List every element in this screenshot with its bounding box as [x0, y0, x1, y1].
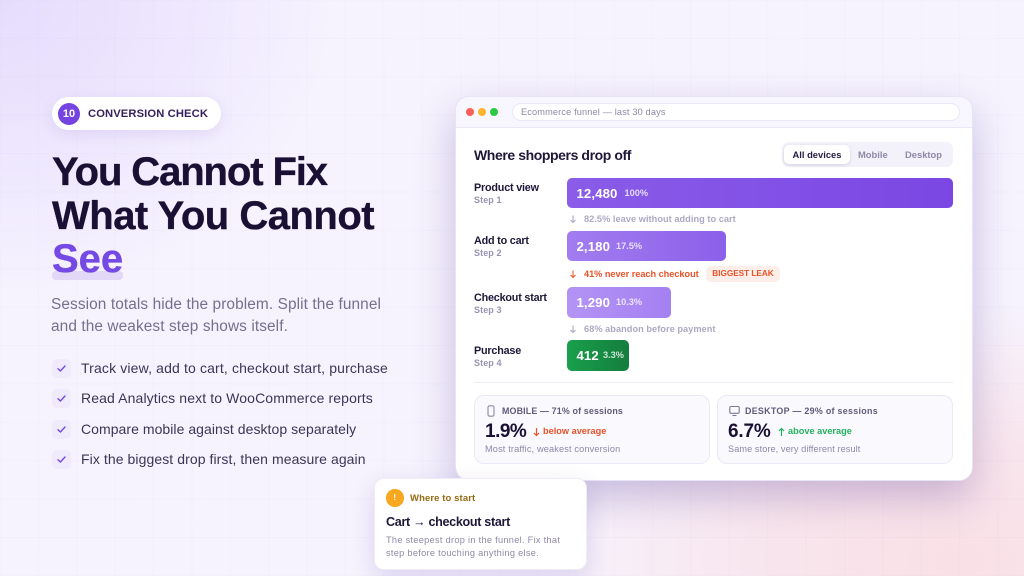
mobile rate: 1.9% — [485, 421, 526, 442]
funnel bar 3: 10.3% — [616, 297, 642, 307]
icon: phone — [487, 405, 495, 417]
address bar: Ecommerce funnel — last 30 days — [521, 107, 666, 117]
callout: where to start — [374, 478, 587, 570]
divider — [474, 382, 953, 383]
desktop rate: 6.7% — [728, 421, 771, 442]
funnel bar 4 — [567, 340, 629, 371]
icon: alert: ! — [393, 493, 396, 502]
mobile note: Most traffic, weakest conversion — [485, 444, 620, 454]
callout heading: Cart → checkout start — [386, 514, 510, 528]
address bar — [512, 103, 960, 121]
callout text: The steepest drop in the funnel. Fix that — [386, 535, 560, 545]
subtitle — [51, 296, 381, 335]
arrow down 1 — [570, 216, 576, 224]
mobile heading: MOBILE — 71% of sessions — [502, 406, 623, 416]
highlight under See — [52, 271, 123, 280]
mobile comparison: below average — [543, 426, 606, 436]
item 1: Track view, add to cart, checkout start, purchase — [81, 360, 388, 376]
desktop heading: DESKTOP — 29% of sessions — [745, 406, 878, 416]
chart heading: Where shoppers drop off — [474, 147, 631, 163]
subtitle: Session totals hide the problem. Split the funnel — [51, 296, 381, 312]
funnel step 1 sublabel: Step 1 — [474, 195, 502, 205]
panel: browser window — [455, 96, 973, 481]
arrow down 2 — [570, 270, 576, 278]
icon: alert — [386, 489, 404, 506]
funnel bar 2: 17.5% — [616, 241, 642, 251]
title accent word: See — [52, 236, 123, 280]
callout text — [386, 535, 560, 558]
icon: monitor — [729, 406, 740, 416]
window dot yellow — [478, 108, 486, 116]
drop-off note 1: 82.5% leave without adding to cart — [584, 214, 736, 224]
item 3: Compare mobile against desktop separately — [81, 420, 356, 436]
checklist — [52, 359, 388, 469]
subtitle: and the weakest step shows itself. — [51, 318, 288, 335]
funnel bar 1 — [567, 178, 953, 208]
tab: mobile: Mobile — [858, 149, 888, 160]
desktop comparison: above average — [788, 426, 852, 436]
tab: all devices — [784, 145, 850, 164]
funnel step 4 sublabel: Step 4 — [474, 358, 502, 368]
item 4: Fix the biggest drop first, then measure again — [81, 451, 366, 467]
funnel step 3 label: Checkout start — [474, 292, 547, 304]
arrow up green — [778, 428, 784, 436]
funnel bar 4: 412 — [576, 348, 599, 363]
title — [52, 150, 374, 280]
desktop note: Same store, very different result — [728, 444, 860, 454]
drop-off note 3: 68% abandon before payment — [584, 324, 716, 334]
funnel bar 1: 100% — [624, 188, 648, 198]
funnel bar 1: 12,480 — [576, 186, 617, 201]
browser toolbar — [456, 97, 972, 128]
funnel bar 2 — [567, 231, 726, 261]
window dot red — [466, 108, 474, 116]
biggest leak tag — [706, 266, 780, 282]
funnel step 4 label: Purchase — [474, 345, 521, 357]
funnel step 3 sublabel: Step 3 — [474, 305, 502, 315]
funnel bar 3 — [567, 287, 671, 318]
device tabs — [782, 142, 953, 167]
funnel step 2 sublabel: Step 2 — [474, 248, 502, 258]
arrow down red — [534, 428, 540, 436]
card: desktop — [717, 395, 953, 464]
card: mobile — [474, 395, 710, 464]
drop-off note 2: 41% never reach checkout — [584, 269, 699, 279]
badge number: 10 — [63, 108, 75, 120]
badge label: CONVERSION CHECK — [88, 108, 208, 120]
tab: desktop: Desktop — [905, 149, 942, 160]
window dot green — [490, 108, 498, 116]
arrow down 3 — [570, 326, 576, 334]
callout text: step before touching anything else. — [386, 548, 539, 558]
funnel step 1 label: Product view — [474, 182, 539, 194]
badge: conversion check — [52, 97, 221, 130]
tab: all devices: All devices — [792, 149, 842, 160]
badge number — [58, 102, 80, 124]
callout label: Where to start — [410, 492, 475, 504]
funnel bar 3: 1,290 — [576, 295, 610, 310]
item 2: Read Analytics next to WooCommerce reports — [81, 390, 373, 406]
title line 2: What You Cannot — [52, 194, 374, 238]
funnel bar 4: 3.3% — [603, 350, 624, 360]
funnel step 2 label: Add to cart — [474, 235, 529, 247]
biggest leak tag: BIGGEST LEAK — [712, 269, 774, 278]
funnel bar 2: 2,180 — [576, 239, 610, 254]
title line 1: You Cannot Fix — [52, 150, 327, 194]
